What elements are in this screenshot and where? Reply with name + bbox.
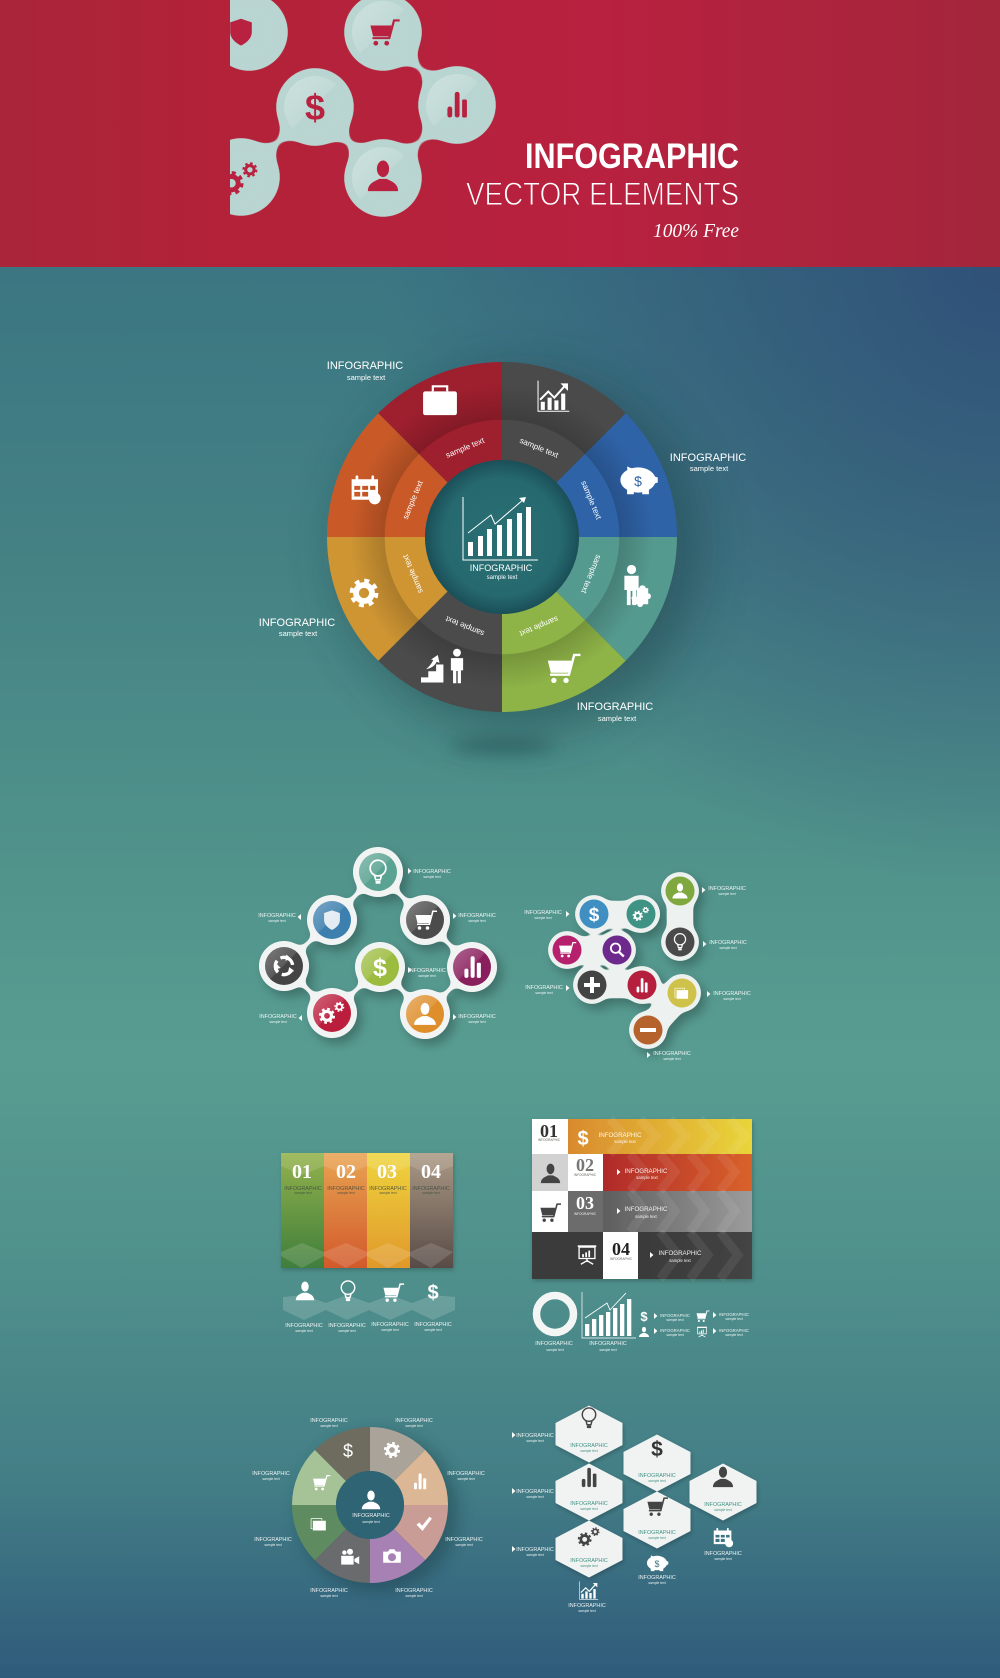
- hexagon bottom items: $: [654, 1559, 660, 1569]
- pill icons: [559, 883, 688, 1032]
- banner numbers and labels: 01: [292, 1161, 312, 1183]
- ring segment sample text: sample text: [518, 436, 560, 460]
- donut chart: INFOGRAPHIC: [535, 1341, 573, 1347]
- pill discs: [552, 876, 696, 1044]
- banner: node network with icons: [202, 0, 496, 217]
- pie labels: INFOGRAPHIC: [252, 1471, 290, 1477]
- hexagon text: sample text: [714, 1508, 732, 1512]
- hexagon side labels: INFOGRAPHIC: [516, 1433, 554, 1439]
- pill labels: INFOGRAPHIC: [524, 910, 562, 916]
- banner: node network with icons: $: [305, 87, 325, 128]
- mini icon legend: sample text: [725, 1317, 743, 1321]
- row numbers: 02: [576, 1155, 594, 1175]
- pill labels: INFOGRAPHIC: [713, 991, 751, 997]
- vertical banners diagram: [281, 1153, 455, 1333]
- donut chart: [535, 1296, 574, 1352]
- mini icon legend: INFOGRAPHIC: [660, 1328, 690, 1333]
- hexagon side labels: INFOGRAPHIC: [516, 1547, 554, 1553]
- pie labels: [252, 1418, 485, 1598]
- ring segment sample text: sample text: [444, 614, 486, 638]
- network labels: INFOGRAPHIC: [259, 1014, 297, 1020]
- banner: red header: [0, 0, 1000, 267]
- network labels: sample text: [418, 974, 436, 978]
- hexagon cluster diagram: [512, 1406, 756, 1613]
- row text labels: INFOGRAPHIC: [599, 1132, 642, 1139]
- banner bottom labels: sample text: [295, 1329, 313, 1333]
- pie labels: sample text: [405, 1424, 423, 1428]
- row numbers: INFOGRAPHIC: [574, 1173, 597, 1177]
- banner title: INFOGRAPHIC: [525, 137, 739, 176]
- hexagon text: sample text: [648, 1479, 666, 1483]
- network icons: $: [373, 954, 387, 982]
- hexagon text: INFOGRAPHIC: [704, 1502, 742, 1508]
- hexagon text: INFOGRAPHIC: [570, 1443, 608, 1449]
- pie labels: sample text: [320, 1424, 338, 1428]
- row text labels: sample text: [635, 1214, 658, 1219]
- ring segment sample text: sample text: [444, 436, 486, 460]
- row icons: $: [577, 1128, 589, 1150]
- ring callout labels: INFOGRAPHIC: [670, 452, 746, 464]
- row text labels: sample text: [614, 1139, 637, 1144]
- pie icons: sample text: [362, 1520, 380, 1524]
- ring callout labels: INFOGRAPHIC: [259, 617, 335, 629]
- banner numbers and labels: INFOGRAPHIC: [327, 1186, 365, 1192]
- row text labels: INFOGRAPHIC: [625, 1206, 668, 1213]
- banner numbers and labels: sample text: [337, 1191, 355, 1195]
- banner bottom labels: INFOGRAPHIC: [371, 1322, 409, 1328]
- ring callout labels: INFOGRAPHIC: [577, 701, 653, 713]
- pie labels: INFOGRAPHIC: [395, 1418, 433, 1424]
- mini icon legend: INFOGRAPHIC: [719, 1328, 749, 1333]
- row text labels: INFOGRAPHIC: [625, 1168, 668, 1175]
- network labels: INFOGRAPHIC: [258, 913, 296, 919]
- mini icon legend: INFOGRAPHIC: [719, 1312, 749, 1317]
- small bar chart: sample text: [599, 1348, 617, 1352]
- banner numbers and labels: sample text: [422, 1191, 440, 1195]
- banner numbers and labels: INFOGRAPHIC: [284, 1186, 322, 1192]
- pie labels: INFOGRAPHIC: [310, 1418, 348, 1424]
- vertical banner columns: [281, 1153, 453, 1268]
- banner numbers and labels: [284, 1161, 450, 1195]
- ring callout labels: INFOGRAPHIC: [327, 360, 403, 372]
- hexagon side labels: sample text: [526, 1553, 544, 1557]
- hexagon text: INFOGRAPHIC: [570, 1501, 608, 1507]
- network labels: INFOGRAPHIC: [458, 913, 496, 919]
- banner bottom labels: sample text: [424, 1328, 442, 1332]
- row text labels: INFOGRAPHIC: [659, 1250, 702, 1257]
- banner numbers and labels: sample text: [379, 1191, 397, 1195]
- banner numbers and labels: 02: [336, 1161, 356, 1183]
- small bar chart: INFOGRAPHIC: [589, 1341, 627, 1347]
- hexagon text: sample text: [580, 1564, 598, 1568]
- banner numbers and labels: sample text: [294, 1191, 312, 1195]
- pill labels: sample text: [535, 991, 553, 995]
- hexagon side labels: sample text: [526, 1439, 544, 1443]
- node network diagram: [258, 847, 497, 1039]
- ring icons: $: [634, 473, 642, 489]
- hexagon icons: $: [651, 1438, 663, 1461]
- hexagon text: sample text: [580, 1449, 598, 1453]
- pie segments: [292, 1427, 448, 1583]
- row numbers: INFOGRAPHIC: [574, 1212, 597, 1216]
- pill labels: sample text: [663, 1057, 681, 1061]
- ring callout labels: sample text: [690, 464, 729, 473]
- banner title: VECTOR ELEMENTS: [466, 176, 739, 212]
- ring segment sample text: [401, 436, 603, 638]
- pill labels: INFOGRAPHIC: [708, 886, 746, 892]
- banner bottom labels: sample text: [338, 1329, 356, 1333]
- banner title: [466, 137, 739, 242]
- banner numbers and labels: 04: [421, 1161, 441, 1183]
- hexagon bottom items: [568, 1528, 742, 1613]
- network labels: sample text: [468, 919, 486, 923]
- row text labels: sample text: [636, 1175, 659, 1180]
- row numbers: INFOGRAPHIC: [610, 1257, 633, 1261]
- ring icons: [352, 381, 658, 683]
- network labels: INFOGRAPHIC: [408, 968, 446, 974]
- network nodes and links: [259, 847, 497, 1039]
- mini icon legend: sample text: [725, 1333, 743, 1337]
- network labels: sample text: [423, 875, 441, 879]
- pie labels: INFOGRAPHIC: [447, 1471, 485, 1477]
- network labels: INFOGRAPHIC: [413, 869, 451, 875]
- banner bottom labels: [285, 1322, 452, 1333]
- pill labels: INFOGRAPHIC: [709, 940, 747, 946]
- banner bottom labels: INFOGRAPHIC: [328, 1323, 366, 1329]
- pill labels: sample text: [534, 916, 552, 920]
- pie labels: sample text: [455, 1543, 473, 1547]
- pie labels: sample text: [264, 1543, 282, 1547]
- pie labels: INFOGRAPHIC: [254, 1537, 292, 1543]
- hexagon text: INFOGRAPHIC: [638, 1473, 676, 1479]
- hexagon bottom items: INFOGRAPHIC: [638, 1575, 676, 1581]
- banner numbers and labels: INFOGRAPHIC: [412, 1186, 450, 1192]
- network labels: INFOGRAPHIC: [458, 1014, 496, 1020]
- row numbers: INFOGRAPHIC: [538, 1138, 561, 1142]
- pie icons: INFOGRAPHIC: [352, 1513, 390, 1519]
- hexagon bottom items: INFOGRAPHIC: [568, 1603, 606, 1609]
- ring callout labels: sample text: [279, 629, 318, 638]
- ring callout labels: sample text: [347, 373, 386, 382]
- centre bar chart: INFOGRAPHIC: [470, 563, 533, 573]
- centre bar chart: [463, 497, 538, 581]
- main ring diagram: [259, 360, 746, 754]
- hexagon text: sample text: [648, 1536, 666, 1540]
- banner bottom labels: INFOGRAPHIC: [414, 1322, 452, 1328]
- pill labels: INFOGRAPHIC: [653, 1051, 691, 1057]
- row chevrons: [610, 1119, 745, 1279]
- hexagon text: INFOGRAPHIC: [638, 1530, 676, 1536]
- ring segments: [327, 362, 677, 712]
- row text labels: sample text: [669, 1258, 692, 1263]
- mini icon legend: sample text: [666, 1333, 684, 1337]
- centre bar chart: sample text: [487, 575, 518, 581]
- eight segment pie diagram: [252, 1418, 485, 1598]
- pill icons: $: [589, 905, 600, 926]
- pill labels: [524, 886, 751, 1061]
- hexagon icons: [579, 1408, 733, 1545]
- pie centre: [336, 1471, 404, 1539]
- ring segment sample text: sample text: [579, 479, 603, 521]
- stacked rows diagram: [532, 1119, 752, 1352]
- ring callout labels: [259, 360, 746, 723]
- mini icon legend: INFOGRAPHIC: [660, 1313, 690, 1318]
- ring centre: [425, 460, 579, 614]
- pie labels: sample text: [457, 1477, 475, 1481]
- row numbers: [538, 1121, 633, 1261]
- pie labels: sample text: [320, 1594, 338, 1598]
- ring callout labels: sample text: [598, 714, 637, 723]
- pill shapes: [548, 872, 701, 1049]
- hexagons: [556, 1406, 756, 1578]
- donut chart: sample text: [546, 1348, 564, 1352]
- network icons: [274, 860, 481, 1025]
- mini icon legend: sample text: [666, 1318, 684, 1322]
- hexagon bottom items: sample text: [578, 1609, 596, 1613]
- pie labels: INFOGRAPHIC: [445, 1537, 483, 1543]
- hexagon text: sample text: [580, 1507, 598, 1511]
- banner numbers and labels: 03: [377, 1161, 397, 1183]
- hexagon text: [570, 1443, 742, 1568]
- hexagon side labels: [512, 1432, 554, 1557]
- hexagon bottom items: sample text: [714, 1557, 732, 1561]
- pie icons: [311, 1441, 432, 1565]
- ring segment sample text: sample text: [401, 553, 425, 595]
- row icons: [540, 1128, 596, 1264]
- ring segment sample text: sample text: [401, 479, 425, 521]
- pie labels: INFOGRAPHIC: [395, 1588, 433, 1594]
- network coloured discs: [265, 853, 491, 1033]
- hexagon side labels: INFOGRAPHIC: [516, 1489, 554, 1495]
- pie labels: sample text: [405, 1594, 423, 1598]
- pill labels: sample text: [718, 892, 736, 896]
- pie icons: $: [343, 1441, 353, 1461]
- small bar chart: [582, 1292, 636, 1352]
- banner bottom labels: INFOGRAPHIC: [285, 1323, 323, 1329]
- stacked rows blocks: [532, 1119, 752, 1279]
- row numbers: 03: [576, 1193, 594, 1213]
- banner title: 100% Free: [653, 220, 739, 242]
- mini icon legend: [639, 1309, 749, 1337]
- row numbers: 01: [540, 1121, 558, 1141]
- mini icon legend: $: [640, 1309, 648, 1324]
- pill labels: INFOGRAPHIC: [525, 985, 563, 991]
- banner numbers and labels: INFOGRAPHIC: [369, 1186, 407, 1192]
- ring segment sample text: sample text: [518, 614, 560, 638]
- zigzag band and icons: [283, 1281, 455, 1320]
- row text labels: [599, 1132, 702, 1263]
- banner bottom labels: sample text: [381, 1328, 399, 1332]
- hexagon bottom items: sample text: [648, 1581, 666, 1585]
- ring segment sample text: sample text: [579, 553, 603, 595]
- zigzag band and icons: $: [427, 1282, 439, 1304]
- hexagon text: INFOGRAPHIC: [570, 1558, 608, 1564]
- pie labels: INFOGRAPHIC: [310, 1588, 348, 1594]
- hexagon bottom items: INFOGRAPHIC: [704, 1551, 742, 1557]
- hexagon side labels: sample text: [526, 1495, 544, 1499]
- network labels: [258, 868, 496, 1024]
- pie labels: sample text: [262, 1477, 280, 1481]
- row numbers: 04: [612, 1239, 630, 1259]
- network labels: sample text: [468, 1020, 486, 1024]
- pill labels: sample text: [723, 997, 741, 1001]
- pill pairs diagram: [524, 872, 751, 1061]
- network labels: sample text: [268, 919, 286, 923]
- pill labels: sample text: [719, 946, 737, 950]
- network labels: sample text: [269, 1020, 287, 1024]
